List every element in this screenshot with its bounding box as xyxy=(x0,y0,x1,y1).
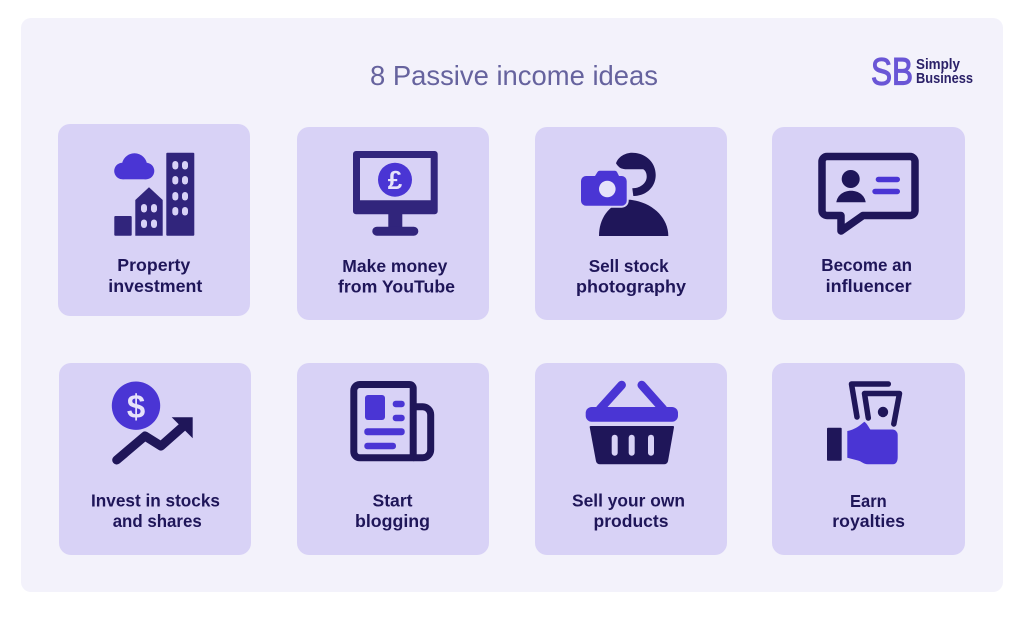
panel: property investment xyxy=(58,124,250,316)
label: photography xyxy=(576,277,686,297)
logo: Simply Business xyxy=(871,52,973,94)
label: Start xyxy=(372,491,413,511)
panel: sell stock photography xyxy=(535,127,727,320)
label xyxy=(355,491,430,531)
panel: become an influencer xyxy=(772,127,965,320)
panel: start blogging xyxy=(297,363,489,555)
label: Sell your own xyxy=(572,491,685,511)
label xyxy=(832,491,905,531)
label: Invest in stocks xyxy=(91,491,220,511)
label: Make money xyxy=(342,256,448,276)
label xyxy=(572,491,685,531)
icon: speech bubble with profile xyxy=(822,156,915,231)
label: products xyxy=(594,511,669,531)
icon: hand holding banknotes xyxy=(827,384,900,464)
label: from YouTube xyxy=(338,277,455,297)
icon: dollar coin and rising arrow: $ xyxy=(127,388,145,425)
label: Sell stock xyxy=(589,256,669,276)
label xyxy=(821,255,912,296)
label xyxy=(338,256,455,297)
icon: newspaper xyxy=(354,384,431,458)
panel: make money from YouTube xyxy=(297,127,489,320)
icon: shopping basket xyxy=(586,385,678,464)
label: and shares xyxy=(113,511,202,531)
icon: photographer with camera xyxy=(579,153,668,236)
icon: monitor with pound coin: £ xyxy=(388,165,403,195)
label xyxy=(91,491,220,531)
logo: Simply Business: Simply xyxy=(916,57,960,73)
logo: Simply Business: SB xyxy=(871,52,913,94)
panel: invest in stocks and shares xyxy=(59,363,251,555)
label xyxy=(576,256,686,297)
icon: buildings and cloud xyxy=(114,153,194,236)
logo: Simply Business: Business xyxy=(916,71,973,87)
title: 8 Passive income ideas xyxy=(370,60,658,91)
label: royalties xyxy=(832,511,905,531)
label: Become an xyxy=(821,255,912,275)
panel: earn royalties xyxy=(772,363,965,555)
label: influencer xyxy=(826,276,912,296)
label: investment xyxy=(108,276,202,296)
label xyxy=(108,255,202,296)
icon: monitor with pound coin xyxy=(353,151,438,236)
label: Property xyxy=(117,255,191,275)
label: Earn xyxy=(850,491,887,511)
panel: sell your own products xyxy=(535,363,727,555)
icon: dollar coin and rising arrow xyxy=(112,382,193,460)
label: blogging xyxy=(355,511,430,531)
